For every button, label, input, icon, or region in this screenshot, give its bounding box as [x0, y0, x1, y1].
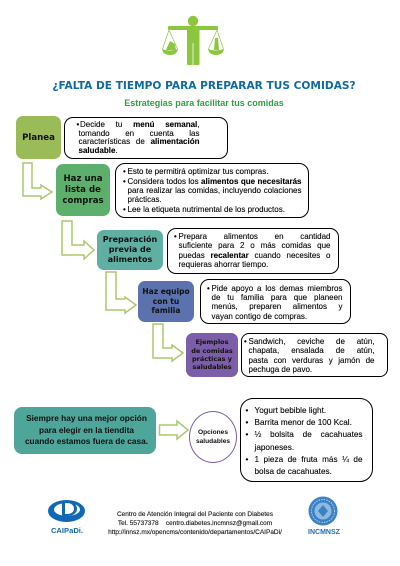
- callout: preparacion: •: [174, 232, 177, 241]
- callout: opciones saludables: [240, 398, 373, 482]
- circle: opciones saludables: saludables: [196, 438, 230, 445]
- footer contact text: Tel. 55737378 centro.diabetes.incmnsz@gmail.com: [118, 520, 272, 527]
- panel: siempre hay una mejor opcion: [14, 407, 156, 454]
- panel: preparacion previa de alimentos: [97, 230, 163, 270]
- panel: haz una lista de compras: Haz una: [63, 174, 103, 184]
- panel: siempre hay una mejor opcion: para elegir en la tiendita: [39, 425, 134, 435]
- callout: preparacion: Prepara alimentos en cantidad: [178, 232, 330, 241]
- callout: lista de compras: Considera todos los alimentos que necesitarás: [128, 177, 302, 186]
- callout: planea: características de alimentación: [78, 137, 200, 146]
- panel: preparacion previa de alimentos: previa de: [109, 245, 151, 254]
- footer contact text: http://innsz.mx/opencms/contenido/departamentos/CAIPaDi/: [108, 529, 282, 536]
- callout: lista de compras: Lee la etiqueta nutrimental de los productos.: [128, 205, 285, 214]
- callout: preparacion: [167, 228, 339, 274]
- callout: equipo: [200, 279, 351, 324]
- callout: planea: Decide tu menú semanal,: [80, 120, 200, 129]
- callout: equipo: Pide apoyo a los demas miembros: [212, 284, 342, 293]
- callout: opciones saludables: •: [246, 455, 248, 464]
- callout: planea: [64, 117, 228, 159]
- callout: equipo: menús, preparen alimentos y: [212, 302, 342, 311]
- callout: opciones saludables: Yogurt bebible light.: [254, 406, 326, 415]
- circle: opciones saludables: Opciones: [198, 429, 228, 436]
- callout: ejemplos: Sandwich, ceviche de atún,: [248, 337, 374, 346]
- arrow: lista to preparacion: [61, 220, 95, 260]
- callout: equipo: de tu familia para que planeen: [212, 293, 342, 302]
- callout: opciones saludables: •: [246, 430, 248, 439]
- callout: opciones saludables: Barrita menor de 100 Kcal.: [254, 418, 352, 427]
- callout: ejemplos: •: [244, 337, 247, 346]
- logo: CAIPaDi: [48, 500, 85, 535]
- arrow: planea to lista: [22, 162, 54, 200]
- callout: opciones saludables: •: [246, 418, 248, 427]
- panel: ejemplos de comidas: [186, 333, 238, 377]
- callout: preparacion: suficiente para 2 o más comidas que: [178, 241, 330, 250]
- callout: lista de compras: •: [123, 177, 126, 186]
- callout: lista de compras: prácticas.: [128, 195, 162, 204]
- panel: haz equipo con tu familia: Haz equipo: [142, 287, 190, 296]
- panel: planea: [16, 116, 61, 159]
- callout: planea: •: [76, 120, 79, 129]
- callout: equipo: •: [207, 284, 210, 293]
- panel: haz equipo con tu familia: familia: [152, 306, 180, 315]
- callout: lista de compras: •: [123, 166, 126, 176]
- logo: CAIPaDi: CAIPaDi.: [51, 526, 83, 535]
- callout: ejemplos: pasta con verduras y jamón de: [248, 356, 374, 364]
- panel: haz equipo con tu familia: con tu: [153, 297, 179, 306]
- panel: preparacion previa de alimentos: alimentos: [108, 255, 152, 264]
- panel: ejemplos de comidas: Ejemplos: [195, 338, 229, 346]
- callout: preparacion: puedas recalentar cuando necesites o: [178, 251, 330, 260]
- footer contact text: Centro de Atención Integral del Paciente con Diabetes: [117, 511, 273, 518]
- callout: opciones saludables: 1 pieza de fruta más ¼ de: [254, 455, 362, 464]
- callout: planea: saludable.: [78, 146, 118, 155]
- title: ¿FALTA DE TIEMPO PARA PREPARAR TUS COMIDAS?: [52, 80, 356, 92]
- panel: siempre hay una mejor opcion: Siempre hay una mejor opción: [26, 413, 147, 423]
- callout: lista de compras: Esto te permitirá optimizar tus compras.: [128, 166, 268, 176]
- callout: planea: tomando en cuenta las: [78, 129, 200, 138]
- panel: haz equipo con tu familia: [138, 281, 194, 322]
- panel: ejemplos de comidas: de comidas: [191, 347, 233, 355]
- panel: haz una lista de compras: lista de: [65, 184, 101, 194]
- arrow: equipo to ejemplos: [152, 323, 184, 362]
- callout: ejemplos: [241, 333, 388, 377]
- panel: haz una lista de compras: [56, 164, 110, 216]
- callout: opciones saludables: •: [246, 406, 248, 415]
- arrow: preparacion to equipo: [105, 271, 138, 314]
- subtitle: Estrategias para facilitar tus comidas: [124, 98, 284, 108]
- logo: INCMNSZ: INCMNSZ: [308, 529, 340, 536]
- panel: ejemplos de comidas: prácticas y: [192, 355, 232, 363]
- callout: lista de compras: •: [123, 205, 126, 214]
- logo: INCMNSZ: [308, 496, 340, 536]
- callout: ejemplos: pechuga de pavo.: [248, 365, 312, 374]
- panel: haz una lista de compras: compras: [62, 196, 104, 206]
- arrow: to opciones saludables: [158, 420, 189, 440]
- circle: opciones saludables: [189, 411, 237, 463]
- callout: opciones saludables: ½ bolsita de cacahuates: [254, 430, 362, 439]
- callout: opciones saludables: bolsa de cacahuates.: [254, 467, 332, 476]
- panel: preparacion previa de alimentos: Preparación: [103, 235, 157, 244]
- callout: lista de compras: [115, 163, 309, 218]
- panel: ejemplos de comidas: saludables: [192, 363, 232, 371]
- callout: equipo: vayan contigo de compras.: [212, 312, 307, 321]
- callout: preparacion: requieras ahorrar tiempo.: [178, 260, 268, 269]
- callout: ejemplos: chapata, ensalada de atún,: [248, 346, 374, 355]
- footer contact text: [108, 511, 282, 536]
- callout: opciones saludables: japoneses.: [254, 443, 294, 452]
- callout: lista de compras: para realizar las comidas, incluyendo colaciones: [128, 186, 302, 195]
- icon: person as balance scale: [162, 16, 224, 65]
- panel: planea: Planea: [22, 132, 55, 142]
- panel: siempre hay una mejor opcion: cuando estamos fuera de casa.: [25, 436, 148, 446]
